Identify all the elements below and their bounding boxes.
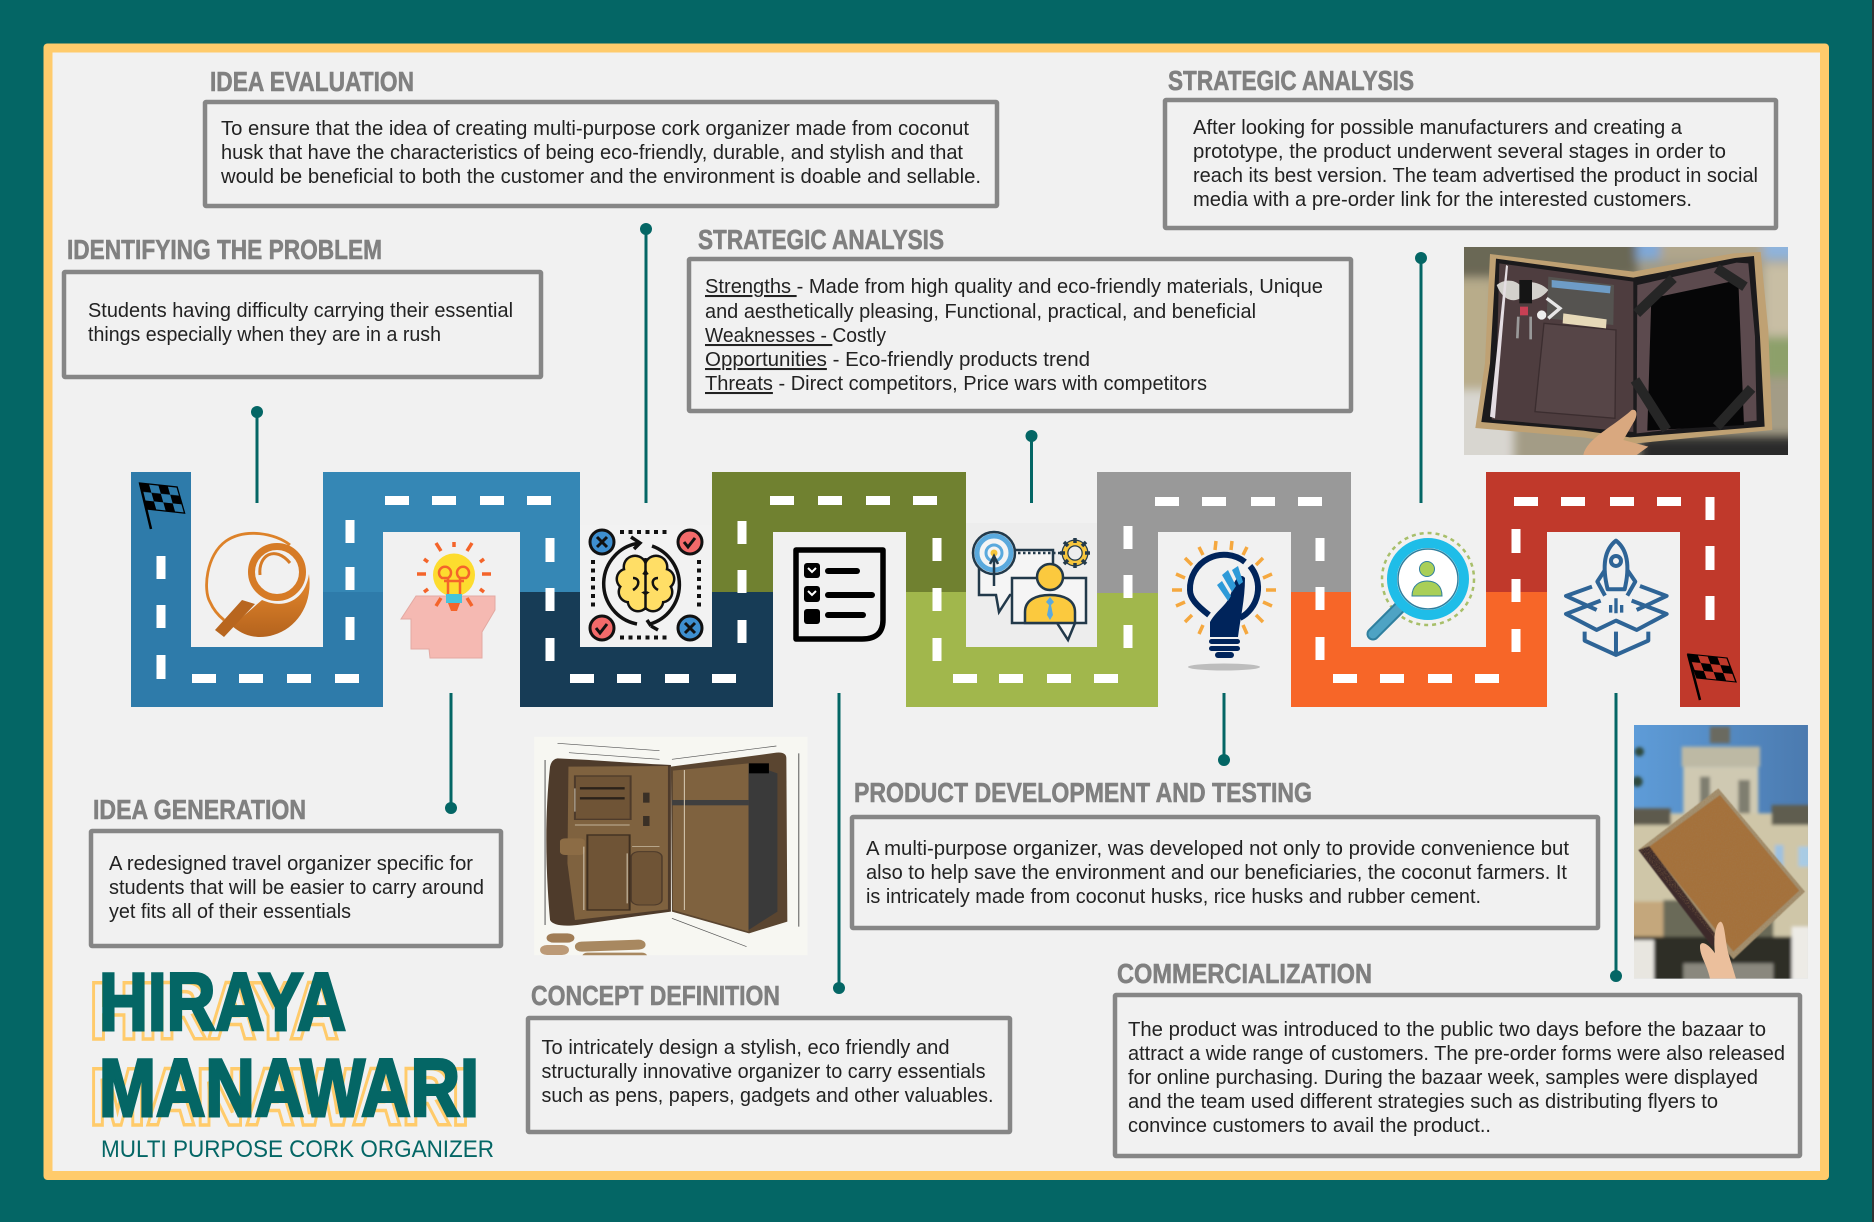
title — [89, 957, 479, 1143]
panel: concept definition — [528, 980, 1010, 1132]
icon: rocket launching from box — [1566, 541, 1667, 655]
box — [852, 817, 1598, 928]
person — [1025, 564, 1075, 623]
body text: for online purchasing. During the bazaar week, samples were displayed — [1128, 1066, 1758, 1089]
connector: identifying the problem — [251, 406, 263, 503]
corner: blue cross — [590, 530, 614, 554]
heading: COMMERCIALIZATION — [1117, 958, 1372, 989]
connector: idea evaluation — [640, 223, 652, 503]
road segment: red — [1486, 472, 1740, 707]
box — [205, 102, 997, 206]
title shadow outline: HIRAYA — [89, 966, 339, 1057]
icon: orange magnifier — [207, 533, 310, 637]
panel: product development and testing — [852, 777, 1598, 928]
road segment: orange — [1291, 592, 1547, 707]
body text: Strengths - Made from high quality and eco-friendly materials, Unique — [705, 275, 1323, 298]
heading: IDEA GENERATION — [93, 794, 306, 825]
corner: red check — [678, 530, 702, 554]
icon: checklist — [796, 550, 883, 639]
body text: Opportunities - Eco-friendly products trend — [705, 348, 1090, 371]
box — [64, 272, 541, 377]
title main lettering: MANAWARI — [99, 1043, 479, 1134]
icon: head with light bulb — [401, 542, 495, 658]
heading: STRATEGIC ANALYSIS — [698, 224, 944, 255]
cork texture — [1633, 787, 1807, 960]
road segment: olive — [712, 472, 966, 592]
road dashes — [156, 496, 1714, 683]
body text: A redesigned travel organizer specific for — [109, 852, 473, 875]
body text: and aesthetically pleasing, Functional, practical, and beneficial — [705, 300, 1256, 323]
connector: strategic analysis centre — [1026, 430, 1038, 503]
panel: idea evaluation — [205, 66, 997, 206]
road segment: blue upper — [323, 472, 580, 592]
icon: hand holding light bulb — [1172, 541, 1276, 670]
body text: is intricately made from coconut husks, rice husks and rubber cement. — [866, 885, 1481, 908]
connector: strategic analysis right — [1415, 252, 1427, 503]
body text: and the team used different strategies such as distributing flyers to — [1128, 1090, 1718, 1113]
photo: cork organizer cover held in hand — [1634, 725, 1808, 979]
body text — [88, 299, 513, 346]
box — [528, 1018, 1010, 1132]
connector: product development — [1218, 693, 1230, 766]
panel: commercialization — [1115, 958, 1800, 1156]
title shadow outline: MANAWARI — [89, 1052, 470, 1143]
body text: things especially when they are in a rush — [88, 323, 441, 346]
corner: blue cross lower — [678, 616, 702, 640]
box — [1115, 995, 1800, 1156]
body text: attract a wide range of customers. The pre-order forms were also released — [1128, 1042, 1785, 1065]
body text — [866, 837, 1569, 908]
gear — [1060, 538, 1090, 568]
icon: brain with cycle arrows — [580, 525, 712, 647]
body text: husk that have the characteristics of being eco-friendly, durable, and stylish and that — [221, 141, 963, 164]
heading: STRATEGIC ANALYSIS — [1168, 65, 1414, 96]
body text — [1128, 1018, 1785, 1137]
body text: After looking for possible manufacturers and creating a — [1193, 116, 1683, 139]
body text: students that will be easier to carry around — [109, 876, 484, 899]
body text: yet fits all of their essentials — [109, 900, 351, 923]
body text: Weaknesses - Costly — [705, 324, 887, 347]
body text: such as pens, papers, gadgets and other valuables. — [542, 1084, 994, 1107]
panel: strategic analysis swot — [689, 224, 1351, 411]
connector: idea generation — [445, 693, 457, 814]
title main lettering — [99, 957, 479, 1134]
road segment: light green — [906, 592, 1158, 707]
body text: Threats - Direct competitors, Price wars with competitors — [705, 372, 1207, 395]
body text: The product was introduced to the public two days before the bazaar to — [1128, 1018, 1766, 1041]
body text: media with a pre-order link for the interested customers. — [1193, 188, 1692, 211]
box — [1165, 100, 1776, 228]
road segment: gray — [1097, 472, 1351, 593]
body text: A multi-purpose organizer, was developed not only to provide convenience but — [866, 837, 1569, 860]
body text: structurally innovative organizer to carry essentials — [542, 1060, 986, 1083]
body text — [705, 275, 1323, 395]
icon: finish flag — [1688, 654, 1736, 700]
title shadow outline — [89, 966, 470, 1143]
target — [973, 532, 1015, 586]
subtitle: MULTI PURPOSE CORK ORGANIZER — [101, 1136, 494, 1163]
road segment: navy — [520, 592, 773, 707]
body text: Students having difficulty carrying their essential — [88, 299, 513, 322]
panel: identifying the problem — [64, 234, 541, 377]
brain — [616, 554, 676, 612]
body text: also to help save the environment and our beneficiaries, the coconut farmers. It — [866, 861, 1567, 884]
heading: IDEA EVALUATION — [210, 66, 414, 97]
box — [91, 831, 501, 946]
body text — [109, 852, 484, 923]
icon: business person with target and gear — [966, 523, 1097, 647]
body text: reach its best version. The team advertised the product in social — [1193, 164, 1758, 187]
body text — [542, 1036, 994, 1107]
body text: To ensure that the idea of creating multi-purpose cork organizer made from coconut — [221, 117, 969, 140]
body text: prototype, the product underwent several stages in order to — [1193, 140, 1726, 163]
road path — [131, 472, 1740, 707]
heading: IDENTIFYING THE PROBLEM — [67, 234, 382, 265]
body text: would be beneficial to both the customer and the environment is doable and sellable. — [220, 165, 981, 188]
corner: red check lower — [590, 616, 614, 640]
body text — [1193, 116, 1758, 211]
connector: commercialization — [1610, 693, 1622, 982]
box — [689, 259, 1351, 411]
heading: CONCEPT DEFINITION — [531, 980, 780, 1011]
icon: person in magnifier — [1373, 533, 1474, 634]
connector: concept definition — [833, 693, 845, 994]
road segment: blue lower — [131, 472, 383, 707]
heading: PRODUCT DEVELOPMENT AND TESTING — [854, 777, 1312, 808]
icon: start flag — [140, 483, 185, 529]
photo: open organizer with tablet — [1464, 247, 1788, 455]
panel: strategic analysis prototype — [1165, 65, 1776, 228]
body text: convince customers to avail the product.. — [1128, 1114, 1491, 1137]
body text: To intricately design a stylish, eco friendly and — [542, 1036, 950, 1059]
photo: organizer dimension drawing — [534, 737, 808, 959]
title main lettering: HIRAYA — [99, 957, 346, 1048]
panel: idea generation — [91, 794, 501, 946]
body text — [220, 117, 981, 188]
